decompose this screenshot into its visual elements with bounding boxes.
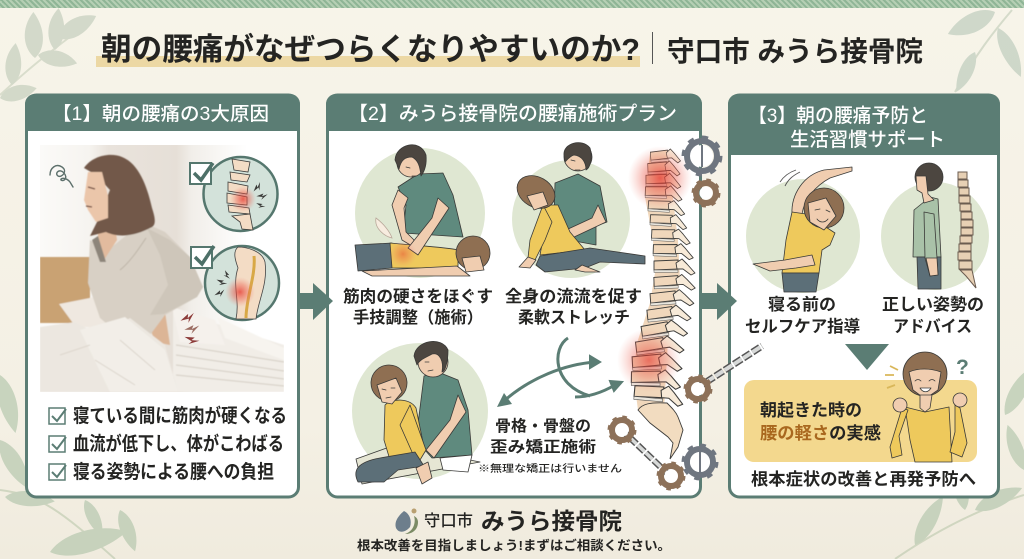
cause list: 寝る姿勢による腰への負担: [73, 460, 274, 483]
gears and chains: [610, 138, 762, 488]
caption: self care: 寝る前の: [768, 295, 836, 314]
top stripe band: [0, 0, 1024, 8]
panel 3 heading: 生活習慣サポート: [790, 129, 945, 151]
arrow: panel 2 to panel 3: [701, 283, 737, 320]
caption: posture correction: 骨格・骨盤の: [495, 416, 591, 435]
leaves: top left: [0, 7, 100, 105]
caption: self care: [745, 295, 860, 336]
panel 1: causes: [25, 94, 300, 497]
cause list: [49, 404, 287, 483]
duvet: [40, 318, 178, 392]
squiggle stress mark: [50, 166, 73, 187]
illustration: manual therapy: [355, 145, 490, 278]
neck: [98, 232, 118, 258]
footer: 守口市: [424, 512, 473, 530]
panel 2: treatment plan: [326, 94, 702, 497]
panel 3: prevention and lifestyle: [728, 94, 1000, 497]
footer: みうら接骨院: [481, 508, 622, 534]
hair: [84, 155, 155, 236]
panel 3 heading: [748, 105, 945, 151]
illustration: happy woman: [885, 352, 969, 462]
illustration: posture correction: [352, 341, 488, 484]
checkbox 3: [49, 464, 66, 480]
clinic name in title: 守口市 みうら接骨院: [667, 36, 923, 67]
caption: self care: セルフケア指導: [745, 317, 860, 336]
illustration: self care stretch: [746, 167, 860, 293]
gear: brown bottom: [658, 464, 684, 488]
pain bolts near waist: [180, 313, 200, 344]
caption: posture advice: 正しい姿勢の: [882, 295, 984, 314]
benefit box: [744, 380, 977, 462]
inset: side view lumbar pain: [205, 246, 279, 320]
pain glow lower: [617, 328, 681, 392]
pillow: [58, 297, 96, 327]
footer: [357, 508, 671, 553]
hand on back: [152, 314, 170, 346]
caption: posture advice: [882, 295, 984, 336]
cause list: 血流が低下し、体がこわばる: [73, 432, 284, 455]
gear: brown lower left: [610, 418, 634, 442]
sacrum: [638, 403, 683, 459]
gear: gray large bottom: [684, 446, 716, 478]
gear: brown small top: [694, 180, 718, 206]
check icon for side view inset: [191, 246, 214, 268]
illustration: correct posture: [881, 163, 989, 290]
check icon for spine inset: [190, 163, 213, 184]
title divider: [652, 32, 653, 64]
title: 朝の腰痛がなぜつらくなりやすいのか?: [101, 32, 640, 67]
headboard: [40, 257, 90, 323]
cause list: 寝ている間に筋肉が硬くなる: [73, 404, 287, 427]
benefit box: 腰の軽さの実感: [760, 423, 881, 443]
panel 1 heading: 【1】朝の腰痛の3大原因: [52, 103, 269, 125]
leaves: bottom left: [0, 373, 142, 559]
conclusion text: 根本症状の改善と再発予防へ: [751, 469, 976, 489]
spine illustration: [617, 146, 695, 459]
footer message: 根本改善を目指しましょう!まずはご相談ください。: [357, 538, 671, 553]
caption: manual therapy: [343, 287, 493, 327]
photo: woman with back pain in bed: [40, 145, 284, 392]
pain glow upper: [628, 146, 692, 210]
down triangle arrow: [845, 344, 889, 370]
gear: gray large top: [684, 138, 720, 174]
panel 2 heading: 【2】みうら接骨院の腰痛施術プラン: [348, 103, 677, 125]
caption: stretch: 柔軟ストレッチ: [518, 308, 630, 327]
curved arrows: [497, 338, 622, 407]
checkbox 2: [49, 436, 66, 452]
checkbox 1: [49, 408, 66, 424]
caption: posture correction: 歪み矯正施術: [490, 438, 597, 456]
arrow: panel 1 to panel 2: [300, 283, 333, 320]
leaves: top right: [944, 4, 1024, 95]
caption: stretch: 全身の流流を促す: [505, 286, 642, 306]
leaves: bottom right: [895, 362, 1024, 559]
chain: right: [697, 346, 762, 388]
illustration: flexibility stretch: [511, 143, 645, 278]
illustration: happy woman: ?: [956, 356, 969, 379]
caption: posture correction: [478, 416, 622, 475]
gear: brown right: [686, 376, 710, 402]
inset: spine pain: [204, 157, 278, 231]
logo mark: [395, 508, 418, 534]
body sweater: [87, 226, 188, 334]
bed surface: [173, 310, 284, 392]
caption: posture advice: アドバイス: [893, 317, 972, 336]
face: [84, 172, 108, 222]
panel 3 heading: 【3】朝の腰痛予防と: [748, 105, 928, 127]
chain: bottom: [622, 430, 670, 476]
benefit box: 朝起きた時の: [760, 401, 862, 420]
caption: manual therapy: 筋肉の硬さをほぐす: [343, 287, 493, 306]
caption: posture correction: ※無理な矯正は行いません: [478, 462, 622, 475]
caption: stretch: [505, 286, 642, 327]
caption: manual therapy: 手技調整（施術）: [353, 307, 483, 327]
